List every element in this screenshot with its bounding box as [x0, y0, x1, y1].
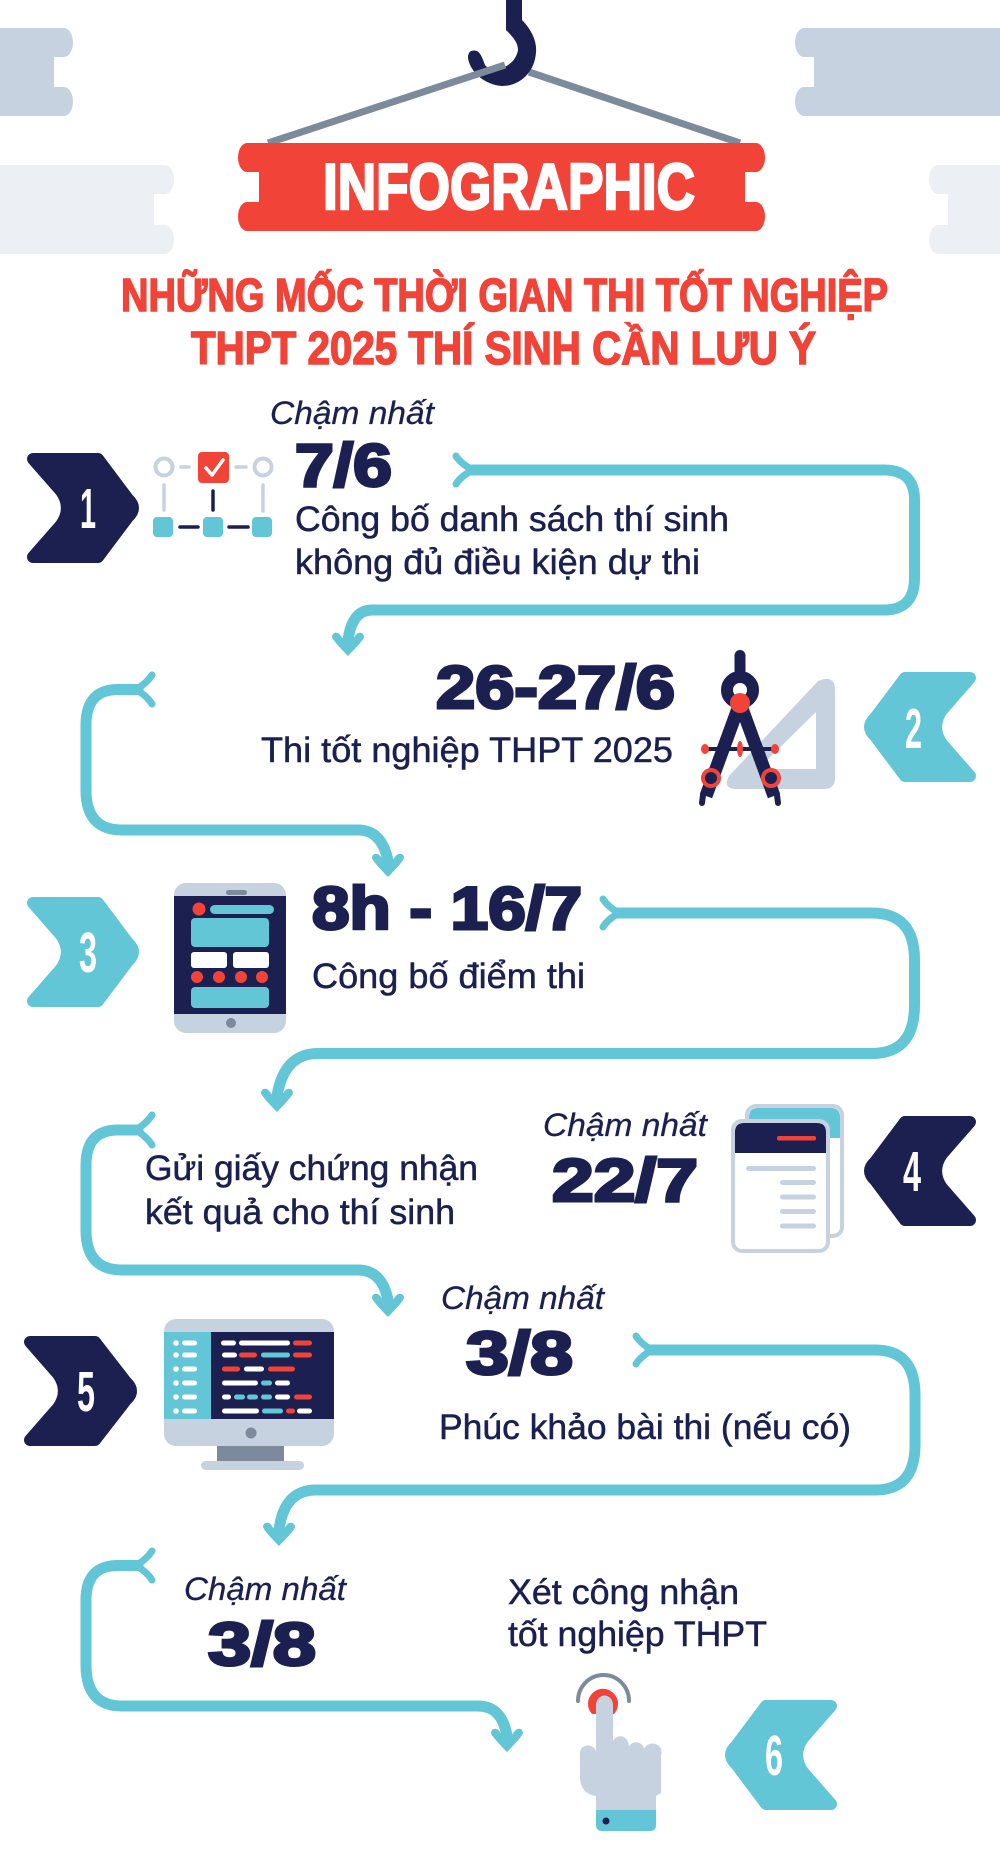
badge 3: 3 [79, 921, 97, 985]
step 2 text: Thi tốt nghiệp THPT 2025 [261, 731, 673, 770]
step 3 text: 8h - 16/7 [312, 875, 582, 942]
badge 5: 5 [77, 1360, 95, 1424]
step 6 description: Xét công nhận [508, 1573, 739, 1612]
flow arrow 3 [261, 899, 914, 1112]
step 4 date: 22/7 [552, 1147, 698, 1214]
flow arrow 5 [263, 1336, 915, 1546]
banner: INFOGRAPHIC: INFOGRAPHIC [323, 150, 695, 223]
step 1 text: Chậm nhất [270, 395, 435, 431]
step 2 text [261, 654, 675, 770]
badge 6: 6 [765, 1724, 783, 1788]
step 5 text: 3/8 [466, 1320, 573, 1387]
badge 4 [870, 1122, 970, 1220]
crane hook and ropes [268, 0, 740, 143]
step 6 description [508, 1573, 767, 1654]
step 1 text: 7/6 [295, 432, 392, 499]
step 6 description: tốt nghiệp THPT [508, 1615, 767, 1654]
title: THPT 2025 THÍ SINH CẦN LƯU Ý [191, 322, 816, 374]
step 3 text [312, 875, 585, 996]
flow arrow 4 [86, 1115, 404, 1317]
badge 5 [30, 1342, 131, 1440]
step 4 description: Gửi giấy chứng nhận [145, 1149, 478, 1188]
step 4 date [543, 1107, 708, 1214]
badge 6 [731, 1706, 831, 1804]
badge 1 [33, 459, 133, 557]
step 1 text: không đủ điều kiện dự thi [295, 543, 700, 582]
background blocks [0, 28, 1000, 254]
flow arrow 1 [332, 456, 914, 656]
title [121, 269, 888, 374]
icon: checklist flowchart [153, 452, 272, 537]
step 4 description: kết quả cho thí sinh [145, 1193, 455, 1232]
icon: desktop monitor with code [164, 1319, 334, 1470]
icon: hand pressing button [578, 1675, 662, 1831]
step 5 text: Chậm nhất [441, 1280, 605, 1316]
icon: compass and set square [701, 650, 835, 803]
icon: tablet [174, 883, 286, 1033]
step 5 text [439, 1280, 851, 1447]
badge 4: 4 [903, 1140, 921, 1204]
step 6 date: 3/8 [208, 1611, 316, 1678]
badge 1: 1 [80, 477, 96, 541]
step 4 date: Chậm nhất [543, 1107, 708, 1143]
step 4 description [145, 1149, 478, 1232]
step 1 text [270, 395, 729, 582]
flow arrow 2 [86, 675, 404, 877]
badge 3 [33, 903, 133, 1001]
step 3 text: Công bố điểm thi [312, 957, 585, 996]
step 6 date [184, 1571, 347, 1678]
step 6 date: Chậm nhất [184, 1571, 347, 1607]
badge 2: 2 [905, 697, 922, 761]
banner: INFOGRAPHIC [238, 143, 765, 231]
flow arrow 6 [86, 1551, 523, 1752]
step 5 text: Phúc khảo bài thi (nếu có) [439, 1408, 851, 1447]
step 1 text: Công bố danh sách thí sinh [295, 500, 729, 539]
badge 2 [870, 678, 970, 776]
icon: documents [733, 1106, 842, 1251]
step 2 text: 26-27/6 [436, 654, 675, 721]
